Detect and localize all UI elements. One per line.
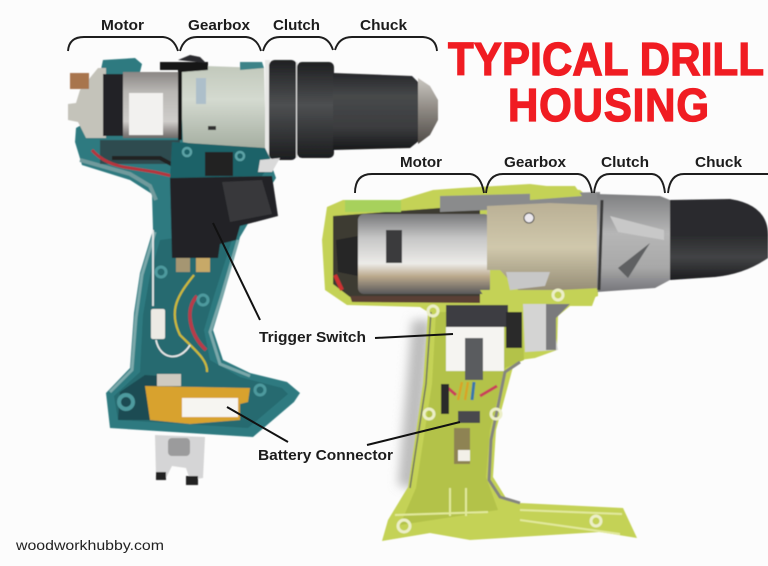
right drill: lime housing with motor, gearbox, clutch and chuck — [322, 184, 768, 541]
right battery terminal — [458, 411, 480, 423]
left switch terminals — [176, 258, 190, 272]
labels: left drill parts: Chuck — [360, 17, 408, 34]
right coloured wires — [458, 382, 468, 400]
left drill: teal housing with motor, gearbox, clutch and chuck — [68, 55, 438, 485]
left grip grey edge — [80, 160, 156, 200]
labels: left drill parts — [101, 17, 408, 34]
labels: right drill parts: Clutch — [601, 154, 649, 171]
right base screw posts — [398, 520, 410, 532]
left lower motor support — [100, 140, 180, 164]
right handle interior — [400, 312, 524, 525]
left motor dark brush holder — [103, 74, 123, 136]
right handle rim — [489, 362, 520, 503]
left housing screw posts — [156, 267, 166, 277]
right housing dark cavity — [333, 205, 480, 297]
right drill handle shadow — [398, 320, 432, 490]
right motor can — [358, 214, 490, 294]
callout: battery connector: Battery Connector — [258, 447, 393, 464]
brackets: left drill — [68, 37, 437, 51]
left chuck nose — [418, 78, 438, 144]
labels: left drill parts: Motor — [101, 17, 144, 34]
right lower motor channel — [350, 296, 480, 303]
labels: left drill parts: Gearbox — [188, 17, 251, 34]
right trigger switch — [446, 305, 508, 327]
labels: left drill parts: Clutch — [273, 17, 320, 34]
labels: right drill parts: Gearbox — [504, 154, 567, 171]
callout: battery connector — [227, 407, 460, 464]
watermark: woodworkhubby.com — [15, 537, 164, 553]
title: HOUSING — [508, 80, 709, 131]
left housing inner cavity — [114, 232, 288, 428]
left battery connector block — [145, 386, 250, 424]
left housing shell — [75, 58, 300, 437]
right spirit level — [345, 200, 401, 212]
left handle wires — [175, 275, 207, 372]
left motor can — [123, 72, 180, 138]
left white connector — [151, 309, 165, 339]
callout: trigger switch — [213, 223, 453, 346]
right gearbox screw — [524, 213, 534, 223]
left clutch rings — [265, 60, 270, 158]
right gearbox — [487, 203, 600, 292]
right top grey shroud — [440, 192, 600, 212]
right housing shell — [322, 184, 637, 541]
brackets: right drill — [355, 174, 768, 193]
left motor rear cap — [68, 68, 106, 138]
right base ribs — [395, 488, 622, 534]
left handle light rim — [110, 232, 250, 392]
title — [448, 34, 764, 131]
callout: trigger switch: Trigger Switch — [259, 329, 366, 346]
right trigger — [523, 304, 558, 352]
left gearbox — [180, 66, 266, 150]
labels: right drill parts — [400, 154, 743, 171]
right motor brush area — [336, 236, 358, 276]
right chuck — [670, 199, 768, 280]
labels: right drill parts: Motor — [400, 154, 442, 171]
left chuck — [333, 73, 420, 150]
labels: right drill parts: Chuck — [695, 154, 743, 171]
title: TYPICAL DRILL — [448, 34, 764, 85]
left belt clip — [155, 435, 205, 480]
right clutch housing — [597, 194, 670, 292]
left brush terminal — [70, 73, 89, 89]
left trigger switch — [170, 176, 278, 258]
